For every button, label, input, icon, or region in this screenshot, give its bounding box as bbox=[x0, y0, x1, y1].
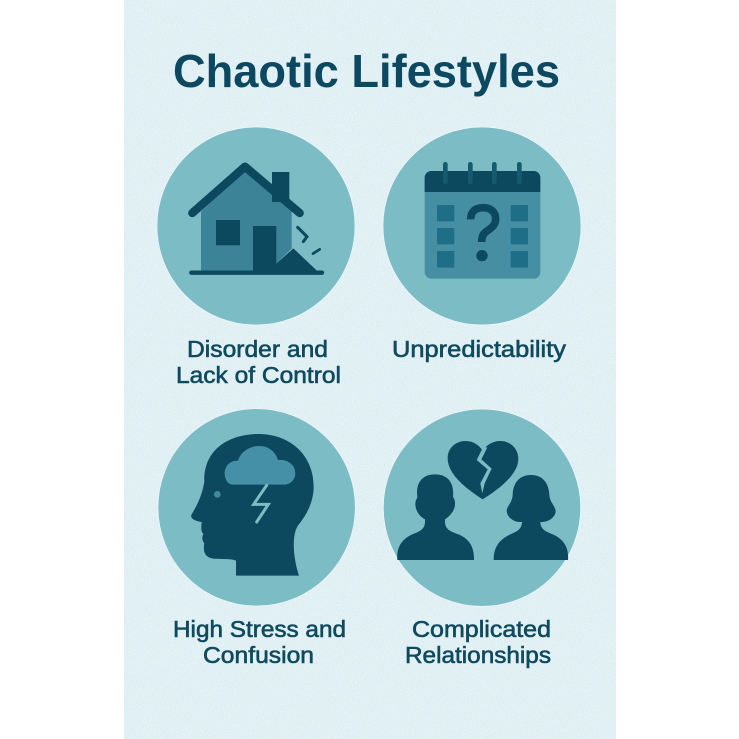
label: high stress and confusion: Confusion bbox=[203, 642, 314, 668]
label: unpredictability: Unpredictability bbox=[392, 336, 567, 362]
icon: head with storm cloud bbox=[158, 409, 355, 606]
title: Chaotic Lifestyles bbox=[173, 45, 560, 97]
label: complicated relationships: Complicated bbox=[412, 616, 551, 642]
panel: unpredictability bbox=[383, 127, 581, 362]
label: high stress and confusion bbox=[173, 616, 346, 668]
icon: house with crumbling corner bbox=[157, 127, 355, 325]
label: disorder and lack of control bbox=[176, 336, 341, 388]
panel: background bbox=[124, 0, 616, 739]
label: disorder and lack of control: Disorder and bbox=[187, 336, 328, 362]
label: disorder and lack of control: Lack of Control bbox=[176, 362, 341, 388]
label: complicated relationships: Relationships bbox=[405, 642, 551, 668]
label: complicated relationships bbox=[405, 616, 551, 668]
icon: calendar with question mark bbox=[383, 127, 581, 325]
label: high stress and confusion: High Stress and bbox=[173, 616, 346, 642]
panel: complicated relationships bbox=[383, 409, 581, 668]
icon: two people and broken heart bbox=[383, 409, 581, 606]
panel: disorder and lack of control bbox=[157, 127, 355, 388]
panel: high stress and confusion bbox=[158, 409, 355, 668]
